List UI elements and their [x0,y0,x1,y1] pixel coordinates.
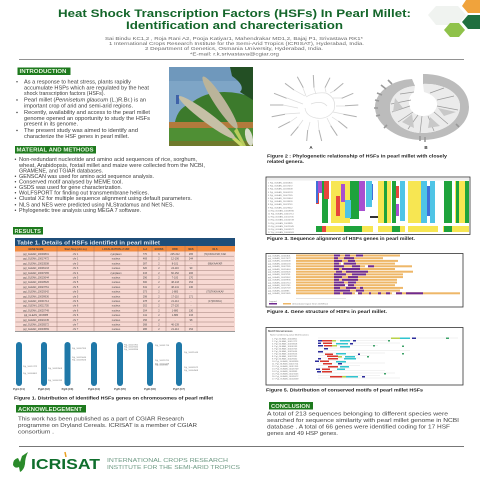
text block: acknowledgement: consortium . [18,430,55,436]
chart: conserved motifs: 3. Pgl_GLEAN_10033508 [272,342,298,346]
table 1: HSFs identified in pearl millet: pgl_GLEAN_10011705 [23,305,49,308]
table 1: HSFs identified in pearl millet: nucleus [112,309,121,312]
text block: materials and methods: Conserved motif analysed by MEME tool. [19,180,123,186]
text block: materials and methods: • [14,208,16,214]
chart: phylogenetic tree B: B [424,145,428,150]
chart: conserved motifs: 4. Pgl_GLEAN_10006133 [272,345,298,348]
table 1: HSFs identified in pearl millet: 770 [143,253,148,256]
table 1: HSFs identified in pearl millet: 2 [158,328,160,331]
chart: chromosome distribution: Pgl5 (C5) [114,387,126,391]
table 1: HSFs identified in pearl millet: 244 [189,258,194,261]
table 1: HSFs identified in pearl millet: 300 [143,281,148,284]
table 1: HSFs identified in pearl millet: 2 [158,300,160,303]
table 1: HSFs identified in pearl millet: 8-101 [172,262,179,265]
table 1: HSFs identified in pearl millet: 2 [158,281,160,284]
text block: conclusion: database . A total of 66 genes were identified coding for 17 HSF [267,424,451,430]
chart: chromosome distribution: Pgl_1003985 [155,364,169,366]
chart: chromosome distribution: Pgl_10001714 [155,345,170,347]
table 1: HSFs identified in pearl millet: nucleus [112,295,121,298]
text block: conclusion: A total of 213 sequences belonging to different species were [267,412,448,418]
chart: chromosome distribution: Pgl_10009936 [124,349,139,351]
table 1: HSFs identified in pearl millet: 27-120 [171,305,179,308]
text block: conclusion: genes and 49 HSP genes. [267,431,338,437]
icon: hexagon logo [428,0,480,37]
table 1: HSFs identified in pearl millet: 171 [189,295,194,298]
chart: conserved motifs: Motif Occurrences [268,329,293,333]
table 1: HSFs identified in pearl millet: 2 [158,324,160,326]
chart: phylogenetic tree A: A [309,145,313,150]
chart: gene structure: pgl_GLEAN_10006133 [268,262,291,265]
chart: chromosome distribution: Pgl1 (C1) [13,387,25,391]
logo: ICRISAT [13,452,100,473]
chart: chromosome distribution: Pgl6 (C6) [144,387,156,391]
chart: sequence alignment: 4 Pgl_GLEAN_10006133 [268,191,293,194]
chart: phylogenetic tree A [270,75,358,150]
heading: results [13,227,43,235]
table 1: HSFs identified in pearl millet: (71)KKKLKSR; KAK [204,253,227,256]
table 1: HSFs identified in pearl millet: 278 [143,300,148,303]
table 1: HSFs identified in pearl millet: 373 [143,291,148,294]
table 1: HSFs identified in pearl millet: chr 5 [73,276,79,280]
table 1: HSFs identified in pearl millet: - [191,305,192,308]
table 1: HSFs identified in pearl millet: chr 3 [73,262,79,265]
table 1: HSFs identified in pearl millet: 48-141 [171,286,179,289]
table 1: HSFs identified in pearl millet: nucleus [112,324,121,326]
table 1: HSFs identified in pearl millet: chr 7 [73,328,79,331]
table 1: HSFs identified in pearl millet: 17-110 [171,295,179,298]
table 1: HSFs identified in pearl millet: nucleus [112,319,121,322]
chart: gene structure: pgl_GLEAN_10020749 [268,287,291,290]
text block: materials and methods: Non-redundant nucleotide and amino acid sequences of rice, sorghum, [19,157,197,163]
text block: introduction: genome opened an opportunity to study the HSFs [24,116,150,122]
text block: conclusion [267,412,460,437]
table 1: HSFs identified in pearl millet: 225-312 [170,253,180,256]
chart: gene structure: pgl_GLEAN_10021045 [268,292,291,295]
table 1: HSFs identified in pearl millet: chr 3 [73,267,79,270]
table 1: HSFs identified in pearl millet: 98 [190,319,193,322]
chart: chromosome distribution: Pgl_10033508 [48,368,63,370]
caption: figure 1: Figure 1. Distribution of identified HSFs genes on chromosomes of pearl millet [14,396,214,400]
table 1: HSFs identified in pearl millet: nucleus [112,286,121,289]
chart: sequence alignment: 11 Pgl_GLEAN_10001714 [268,212,294,216]
caption: figure 5: Figure 5. Distribution of conserved motifs of pearl millet HSFs [266,388,424,392]
chart: conserved motifs: 12. Pgl_GLEAN_10011705 [272,365,299,368]
table 1: HSFs identified in pearl millet: - [191,262,192,265]
chart: conserved motifs: 2. Pgl_GLEAN_10017472 [272,340,298,343]
table 1: HSFs identified in pearl millet: 2 [158,276,160,280]
chart: conserved motifs: 8. Pgl_GLEAN_10023761 [272,355,298,358]
heading: introduction [18,68,70,75]
chart: chromosome distribution: Pgl_10029342 [124,346,139,348]
chart: chromosome distribution: Pgl_10015644 [72,357,87,359]
authors and affiliations: *E-mail: r.k.srivastava@cgiar.org [190,52,280,56]
table 1: HSFs identified in pearl millet: 286 [143,328,148,331]
text block: materials and methods: Phylogenetic tree analysis using MEGA 7 software. [19,208,141,214]
table 1: HSFs identified in pearl millet: 21-114 [171,328,179,331]
table 1: HSFs identified in pearl millet: (17)KKKKA) [208,300,222,303]
text block: introduction: shock transcription factors (HSFs). [24,91,105,97]
chart: chromosome distribution: Pgl_10018526 [72,360,87,362]
table 1: HSFs identified in pearl millet: A.A [143,248,147,251]
divider: header [19,58,464,61]
table 1: HSFs identified in pearl millet: pgl_GLEAN_10021045 [23,319,49,322]
text block: materials and methods: NLS and NES were predicted using NLStradamus and Net NES. [19,202,174,208]
heading: acknowledgement: ACKNOWLEDGEMENT [18,407,82,413]
table 1: HSFs identified in pearl millet: NES [188,248,194,251]
chart: chromosome distribution: Pgl_10020749 [155,364,170,366]
heading: conclusion: CONCLUSION [271,404,310,410]
text block: institute name: INSTITUTE FOR THE SEMI-ARID TROPICS [107,465,241,471]
table 1: HSFs identified in pearl millet: 1-880 [172,314,179,317]
chart: sequence alignment: 12 Pgl_GLEAN_10011705 [268,216,294,219]
text block: introduction: present in its genome. [24,122,78,128]
chart: gene structure: pgl_GLEAN_10011705 [268,284,291,287]
text block: materials and methods: wheat, Arabidopsis, foxtail millet and maize were collected from the NCBI, [19,163,205,169]
authors and affiliations: 1 International Crops Research Institute for the Semi-Arid Tropics (ICRISAT), Hyderabad, India. [109,41,364,46]
text block: institute name [107,458,241,471]
text block: materials and methods: • [14,157,16,163]
chart: gene structure: pgl_GLEAN_10029342 [268,276,291,279]
text block: materials and methods: • [14,174,16,180]
chart: sequence alignment: 6 Pgl_GLEAN_10015644 [268,197,293,200]
chart: gene structure: pgl_GLEAN_10015644 [268,268,291,271]
table 1: HSFs identified in pearl millet: 2 [158,314,160,317]
text block: introduction: The present study was aimed to identify and [24,128,138,134]
caption: figure 2: Figure 2 : Phylogenetic relationship of HSFs in pearl millet with closely [267,154,448,158]
table 1: HSFs identified in pearl millet: chr 5 [73,291,79,294]
table 1: HSFs identified in pearl millet: nucleus [112,267,121,270]
table 1: HSFs identified in pearl millet: - [191,291,192,294]
table 1: HSFs identified in pearl millet: chr 6 [73,314,79,317]
table 1: HSFs identified in pearl millet: NLS [212,248,218,251]
text block: introduction: important crop of arid and semi-arid regions. [24,103,133,109]
chart: conserved motifs: 17. Pgl_GLEAN_10004569 [272,378,299,380]
table 1: HSFs identified in pearl millet: pgl_GLEAN_10000801 [23,253,49,256]
table 1: HSFs identified in pearl millet: 130 [189,286,194,289]
table 1: HSFs identified in pearl millet: 2 [158,272,160,275]
heading: material and methods [15,146,96,154]
table 1: HSFs identified in pearl millet: 302 [143,305,148,308]
table 1: HSFs identified in pearl millet: pgl_GLEAN_10020749 [23,309,49,312]
caption: figure 4: Figure 4. Gene structure of HSFs in pearl millet. [267,309,387,314]
table 1: HSFs identified in pearl millet: 298 [143,295,148,298]
chart: chromosome distribution [13,342,199,391]
heading: material and methods: MATERIAL AND METHODS [16,148,94,154]
table 1: HSFs identified in pearl millet: chr 6 [73,309,79,312]
table 1: HSFs identified in pearl millet: 2 [158,286,160,289]
chart: conserved motifs [266,328,463,385]
table 1: HSFs identified in pearl millet: - [191,324,192,326]
table 1: HSFs identified in pearl millet: 170 [189,276,194,280]
caption: figure 2: related genera. [267,159,304,164]
text block: materials and methods: Clustal X2 for multiple sequence alignment using default parameters. [19,196,192,202]
table 1: HSFs identified in pearl millet: pgl_GLEAN_10006133 [23,267,49,270]
chart: sequence alignment: 7 Pgl_GLEAN_10018526 [268,200,293,203]
table 1: HSFs identified in pearl millet: pgl_GLEAN_10004569 [23,328,49,331]
table 1: HSFs identified in pearl millet: chr 5 [73,281,79,284]
table 1: HSFs identified in pearl millet: pgl_GLEAN_1003985 [24,314,49,317]
chart: phylogenetic tree B [374,74,469,150]
text block: introduction: As a response to heat stress, plants rapidly [24,80,131,86]
table 1: HSFs identified in pearl millet: 206 [189,272,194,275]
text block: introduction: Pearl millet ( Pennisetum glaucum (L.)R.Br.) is an [24,98,146,104]
chart: conserved motifs: 11. Pgl_GLEAN_10001714 [272,362,299,366]
table 1: HSFs identified in pearl millet: 21-114 [171,300,179,303]
table 1: HSFs identified in pearl millet: chr 1 [73,258,79,261]
table 1: HSFs identified in pearl millet: 296 [143,276,148,280]
table 1: HSFs identified in pearl millet: pgl_GLEAN_10033508 [23,262,49,265]
table 1: HSFs identified in pearl millet: 2 [158,309,160,312]
table 1: HSFs identified in pearl millet: 154 [189,328,194,331]
chart: sequence alignment: 10 Pgl_GLEAN_10009936 [268,209,295,212]
chart: conserved motifs: 10. Pgl_GLEAN_10009936 [272,360,299,363]
chart: sequence alignment: 13 Pgl_GLEAN_10020749 [268,219,295,222]
chart: chromosome distribution: Pgl_10007265 [72,348,87,350]
chart: sequence alignment: 8 Pgl_GLEAN_10023761 [268,203,293,206]
table 1: HSFs identified in pearl millet: GENE NAME [28,248,44,251]
chart: sequence alignment: 14 Pgl_GLEAN_1003985 [268,222,293,225]
table 1: HSFs identified in pearl millet: 99 [190,267,193,270]
table 1: HSFs identified in pearl millet: Start-Stop (chr no) [64,248,87,251]
table 1: HSFs identified in pearl millet: nucleus [112,262,121,265]
table 1: HSFs identified in pearl millet: 469 [143,258,148,261]
table 1: HSFs identified in pearl millet: chr 6 [73,300,79,303]
table 1: HSFs identified in pearl millet: cytoplasm [110,272,122,275]
divider: footer [19,446,464,447]
heading: results: RESULTS [14,229,42,235]
table 1: HSFs identified in pearl millet: (75)TKKKAKAV [206,291,224,294]
table 1: HSFs identified in pearl millet: 341 [143,286,148,289]
chart: chromosome distribution: Pgl4 (C4) [88,387,100,391]
chart: gene structure: pgl_GLEAN_10017472 [268,257,291,260]
table 1: HSFs identified in pearl millet: 2 [158,291,160,294]
table 1: HSFs identified in pearl millet: 156 [143,319,148,322]
chart: sequence alignment: 17 Pgl_GLEAN_10004569 [268,231,295,234]
chart: sequence alignment: 3 Pgl_GLEAN_10033508 [268,188,293,191]
table 1: HSFs identified in pearl millet: 2 [158,267,160,270]
chart: gene structure: pgl_GLEAN_10018526 [268,270,291,274]
chart: sequence alignment: 16 Pgl_GLEAN_10005572 [268,228,295,231]
heading: introduction: INTRODUCTION [20,69,67,75]
chart: chromosome distribution: Pgl_10023761 [124,344,139,346]
text block: materials and methods [14,157,205,214]
chart: conserved motifs: Name Combined p-value Motif locations [270,334,310,336]
chart: conserved motifs: 16. Pgl_GLEAN_10005572 [272,375,299,378]
table 1: HSFs identified in pearl millet: chr 4 [73,272,79,275]
table 1: HSFs identified in pearl millet: 24-116 [171,267,179,270]
text block: materials and methods: GSDS was used for gene characterization. [19,185,122,191]
table 1: HSFs identified in pearl millet: 1-883 [172,291,179,294]
chart: gene structure: pgl_GLEAN_10007265 [268,265,291,268]
table 1: HSFs identified in pearl millet: chr 7 [73,324,79,326]
table 1: HSFs identified in pearl millet: 60-152 [171,272,179,275]
logo: ICRISAT: ICRISAT [31,456,100,473]
chart: chromosome distribution: Pgl_10004569 [184,370,199,372]
chart: conserved motifs: 1. Pgl_GLEAN_10000801 [272,338,298,340]
table 1: HSFs identified in pearl millet: pgl_GLEAN_10005572 [23,324,49,326]
table 1: HSFs identified in pearl millet: chr 5 [73,295,79,298]
text block: introduction: accumulate HSPs which are regulated by the heat [24,85,150,91]
chart: chromosome distribution: Pgl3 (C3) [62,387,73,391]
table 1: HSFs identified in pearl millet: pgl_GLEAN_10023761 [23,286,49,289]
chart: chromosome distribution: Pgl_10006133 [48,380,63,382]
table 1: HSFs identified in pearl millet: 411 [143,314,148,317]
table 1: HSFs identified in pearl millet: 154 [189,281,194,284]
text block: materials and methods: GENSCAN was used for amino acid sequence analysis. [19,174,154,180]
table 1: HSFs identified in pearl millet: 265 [189,253,194,256]
table 1: HSFs identified in pearl millet: nucleus [112,258,121,261]
chart: gene structure: Untranslated region Intron CDS/Exon [292,302,329,306]
photo: pearl millet spikes [169,67,255,147]
table 1: HSFs identified in pearl millet: EXONS [155,248,164,251]
chart: chromosome distribution: Pgl7 (C7) [173,387,185,391]
heading: acknowledgement [16,405,86,413]
chart: conserved motifs: 9. Pgl_GLEAN_10029342 [272,358,298,360]
chart: gene structure: pgl_GLEAN_1003985 [268,289,290,292]
table 1: HSFs identified in pearl millet: nucleus [112,328,121,331]
chart: gene structure [266,254,463,307]
chart: sequence alignment: 15 Pgl_GLEAN_10021045 [268,225,295,228]
text block: materials and methods: WoLFSPORT for finding out transmembrane helices. [19,190,149,196]
chart: sequence alignment: 9 Pgl_GLEAN_10029342 [268,206,293,209]
table 1: HSFs identified in pearl millet: 387 [143,262,148,265]
table 1: HSFs identified in pearl millet: - [175,319,176,322]
chart: conserved motifs: 5. Pgl_GLEAN_10007265 [272,348,298,350]
text block: introduction [16,80,151,140]
heading: conclusion [269,402,313,410]
authors and affiliations: Sai Bindu KC1,2 , Roja Rani A2, Pooja Katiyar1, Mahendrakar MD1,2, Bajaj P1, Srivastava RK1* [105,36,364,41]
chart: chromosome distribution: Pgl_10005572 [184,367,199,369]
table 1: HSFs identified in pearl millet: cytoplasm [110,253,122,256]
text block: introduction: characterize the HSF genes in pearl millet. [24,134,129,140]
chart: gene structure: Legend: [269,301,277,303]
title [58,8,411,32]
caption: figure 3: Figure 3. Sequence alignment of HSFs genes in pearl millet. [267,236,415,241]
table 1: HSFs identified in pearl millet: Table 1. Details of HSFs identified in pearl millet [17,240,160,246]
title: Heat Shock Transcription Factors (HSFs) In Pearl Millet: [58,8,411,20]
table 1: HSFs identified in pearl millet: 304 [143,309,148,312]
table 1: HSFs identified in pearl millet: nucleus [112,276,121,280]
table 1: HSFs identified in pearl millet: 48-143 [171,281,179,284]
chart: sequence alignment: 5 Pgl_GLEAN_10007265 [268,194,293,197]
table 1: HSFs identified in pearl millet: 2 [158,305,160,308]
table 1: HSFs identified in pearl millet: pgl_GLEAN_10029342 [23,291,49,294]
text block: materials and methods: GRAMENE, and TGIAR databases. [19,168,103,174]
table 1: HSFs identified in pearl millet: 2 [158,258,160,261]
chart: gene structure: pgl_GLEAN_10001714 [268,281,291,284]
table 1: HSFs identified in pearl millet: 130 [189,309,194,312]
text block: acknowledgement: This work has been published as a part of CGIAR Research [18,416,184,422]
text block: conclusion: searched for sequence similarity with pearl millet genome in NCBI [267,418,460,424]
table 1: HSFs identified in pearl millet: (96)KAAKKR [208,262,222,265]
table 1: HSFs identified in pearl millet: pgl_GLEAN_10001714 [23,300,49,303]
authors and affiliations: 2 Department of Genetics, Osmania University, Hyderabad, India. [145,46,323,51]
chart: chromosome distribution: Pgl_10000801 [23,373,38,375]
table 1: HSFs identified in pearl millet: chr 1 [73,253,79,256]
table 1: HSFs identified in pearl millet: 46-139 [171,324,179,326]
text block: acknowledgement [18,416,197,436]
chart: conserved motifs: 7. Pgl_GLEAN_10018526 [272,352,298,356]
table 1: HSFs identified in pearl millet: 2 [158,262,160,265]
text block: introduction: Recently, availability and access to the pearl millet [24,110,151,116]
table 1: HSFs identified in pearl millet: 6 [158,253,160,256]
table 1: HSFs identified in pearl millet: LOCALIZATION of HSF [102,248,130,251]
text block: acknowledgement: programme on Dryland Cereals. ICRISAT is a member of CGIAR [18,423,197,429]
table 1: HSFs identified in pearl millet: 2 [158,319,160,322]
table 1: HSFs identified in pearl millet: 433 [143,272,148,275]
table 1: HSFs identified in pearl millet: nucleus [112,291,121,294]
title: Identification and charecterisation [126,20,343,32]
text block: materials and methods: • [14,185,16,191]
table 1: HSFs identified in pearl millet: nucleus [112,281,121,284]
text block: institute name: INTERNATIONAL CROPS RESEARCH [107,458,228,464]
chart: gene structure: pgl_GLEAN_10023761 [268,273,291,276]
chart: sequence alignment: 2 Pgl_GLEAN_10017472 [268,185,293,188]
caption: figure 2 [267,154,448,164]
table 1: HSFs identified in pearl millet: nucleus [112,305,121,308]
chart: gene structure: pgl_GLEAN_10000801 [268,254,291,257]
chart: conserved motifs: 13. Pgl_GLEAN_10020749 [272,368,299,370]
chart: chromosome distribution: Pgl_10011705 [155,360,170,362]
table 1: HSFs identified in pearl millet: nucleus [112,300,121,303]
table 1: HSFs identified in pearl millet: pgl_GLEAN_10017472 [23,258,49,261]
chart: conserved motifs: 15. Pgl_GLEAN_10021045 [272,372,299,376]
table 1: HSFs identified in pearl millet: 2 [158,295,160,298]
table 1: HSFs identified in pearl millet [15,238,235,332]
table 1: HSFs identified in pearl millet: DBD [172,248,178,251]
table 1: HSFs identified in pearl millet: 368 [143,324,148,326]
table 1: HSFs identified in pearl millet: - [191,300,192,303]
table 1: HSFs identified in pearl millet: chr 6 [73,305,79,308]
table 1: HSFs identified in pearl millet: pgl_GLEAN_10015644 [23,276,49,280]
table 1: HSFs identified in pearl millet: pgl_GLEAN_10018526 [23,281,49,284]
chart: sequence alignment [266,177,470,234]
chart: gene structure: pgl_GLEAN_10009936 [268,279,291,282]
table 1: HSFs identified in pearl millet: 12-106 [171,258,179,261]
text block: materials and methods: • [14,190,16,196]
table 1: HSFs identified in pearl millet: pgl_GLEAN_10009936 [23,295,49,298]
chart: chromosome distribution: Pgl_10017472 [23,366,38,368]
table 1: HSFs identified in pearl millet: pgl_GLEAN_10007265 [23,272,49,275]
table 1: HSFs identified in pearl millet: chr 5 [73,286,79,289]
chart: gene structure: pgl_GLEAN_10033508 [268,260,291,263]
table 1: HSFs identified in pearl millet: 320 [143,267,148,270]
table 1: HSFs identified in pearl millet: chr 7 [73,319,79,322]
authors and affiliations [105,36,364,56]
text block: materials and methods: • [14,180,16,186]
table 1: HSFs identified in pearl millet: 1-880 [172,309,179,312]
text block: materials and methods: • [14,196,16,202]
chart: chromosome distribution: Pgl2 (C2) [38,387,50,391]
table 1: HSFs identified in pearl millet: 133 [189,314,194,317]
chart: conserved motifs: 14. Pgl_GLEAN_1003985 [272,370,298,373]
chart: conserved motifs: 6. Pgl_GLEAN_10015644 [272,350,298,353]
table 1: HSFs identified in pearl millet: nucleus [112,314,121,317]
text block: materials and methods: • [14,202,16,208]
table 1: HSFs identified in pearl millet: 7-100 [172,276,179,280]
chart: chromosome distribution: Pgl_10021045 [184,352,199,354]
chart: sequence alignment: 1 Pgl_GLEAN_10000801 [268,182,293,184]
